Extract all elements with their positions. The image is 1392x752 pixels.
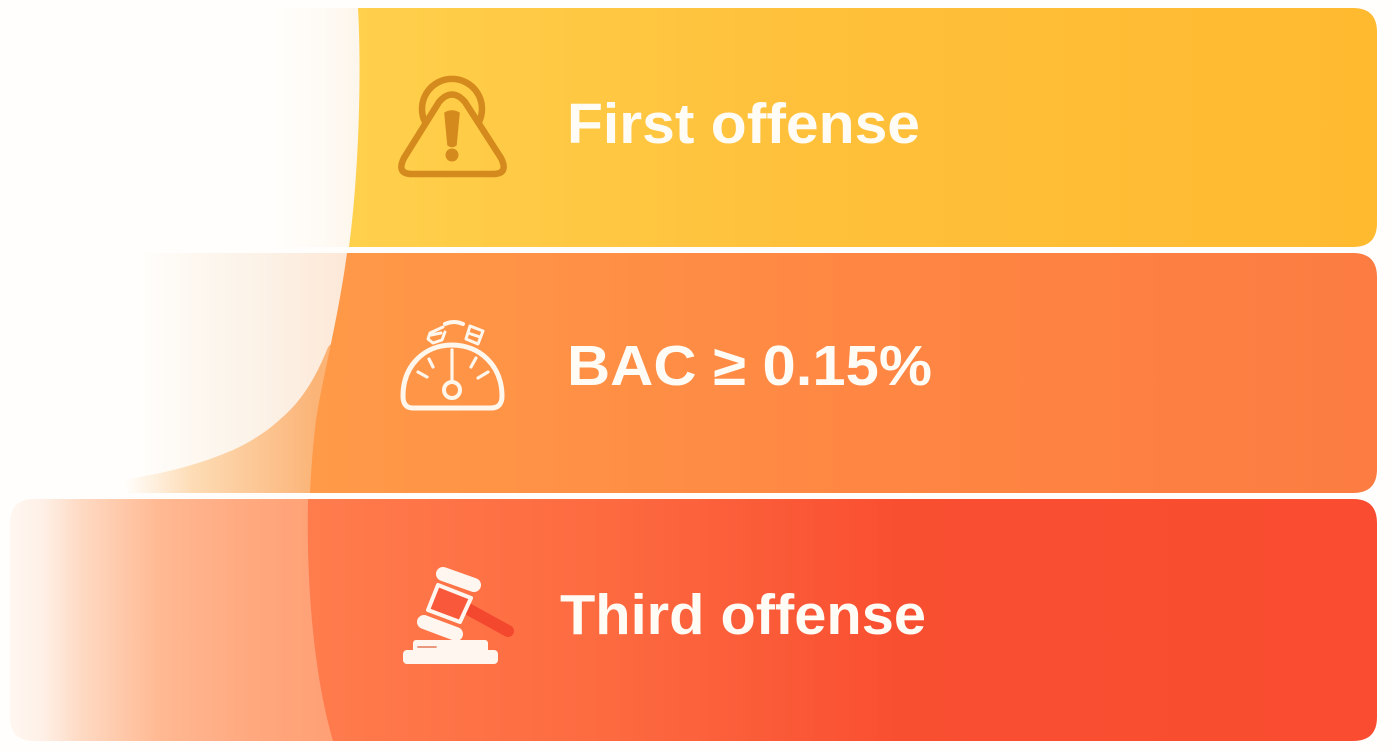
panel: third offense band <box>10 499 1377 741</box>
panel: first offense band <box>270 8 1377 247</box>
heading: First offense: First offense <box>567 92 920 156</box>
icon: stopwatch gauge <box>403 322 502 408</box>
icon: gavel <box>403 574 508 664</box>
heading: Third offense: Third offense <box>560 583 926 647</box>
icon: warning triangle <box>401 79 504 174</box>
panel: BAC band <box>30 253 1377 493</box>
heading: BAC threshold: BAC ≥ 0.15% <box>567 334 932 398</box>
